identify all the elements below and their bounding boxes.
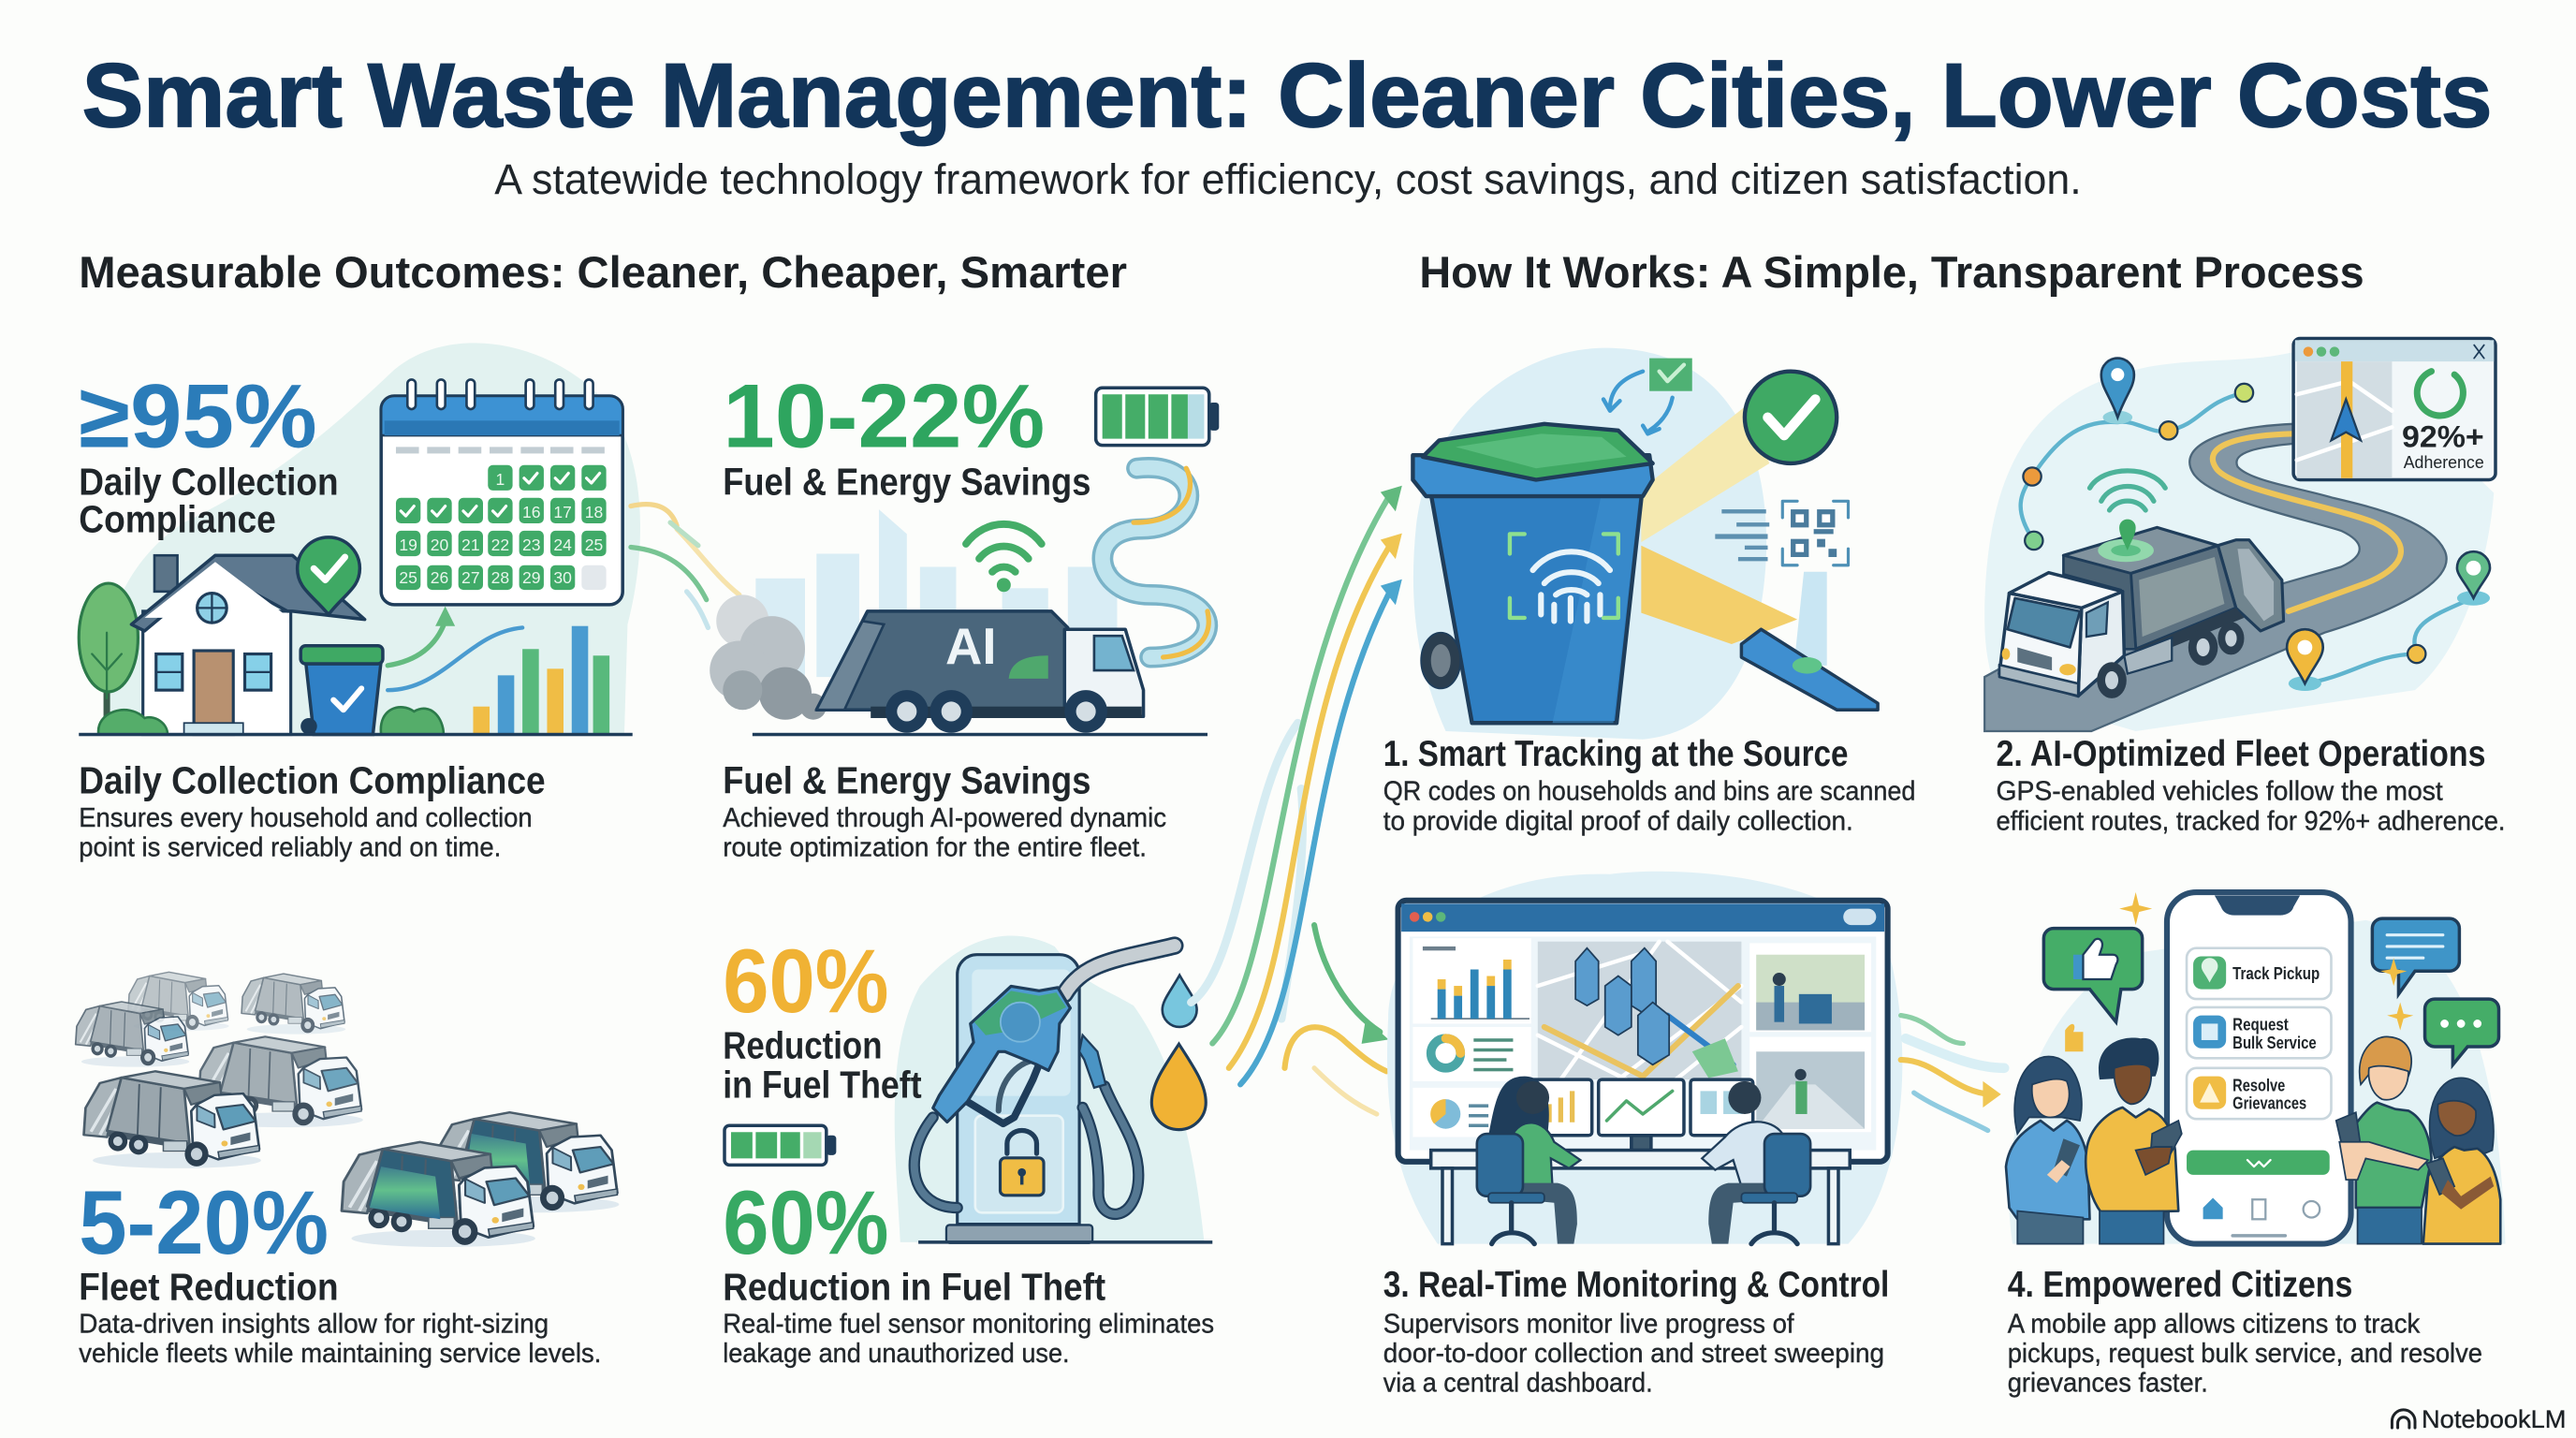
icon: wifi — [2089, 471, 2165, 510]
icon: calendar: 23 — [522, 536, 541, 554]
bar chart — [473, 626, 609, 735]
step description: to provide digital proof of daily collection. — [1383, 806, 1853, 836]
app card: request bulk service: Request — [2232, 1014, 2289, 1034]
figure: supervisor right — [1702, 1081, 1810, 1244]
stat label: in Fuel Theft — [723, 1063, 922, 1106]
scan light — [1794, 572, 1827, 666]
icon: dashboard monitor — [1398, 901, 1888, 1162]
scan beams — [1641, 404, 1797, 644]
step description: grievances faster. — [2008, 1369, 2208, 1399]
dashboard: donut panel — [1412, 1027, 1531, 1081]
background blob — [2009, 920, 2506, 1244]
step title: 1. Smart Tracking at the Source — [1383, 734, 1848, 774]
icon: faded fleet — [76, 972, 363, 1168]
icon: location check bubble — [298, 537, 359, 614]
card description: point is serviced reliably and on time. — [79, 832, 501, 862]
heading: how it works: How It Works: A Simple, Transparent Process — [1419, 248, 2364, 298]
icon: thumbs-up bubble — [2043, 929, 2143, 1022]
skyline — [755, 509, 1117, 677]
icon: green pin — [2457, 551, 2490, 606]
icon: exhaust smoke — [710, 594, 827, 720]
icon: navigation window: Adherence — [2404, 452, 2484, 472]
stat label: Daily Collection — [79, 460, 339, 503]
notebooklm logo: NotebookLM — [2422, 1404, 2566, 1433]
icon: fuel pump — [915, 946, 1175, 1243]
icon: calendar: 30 — [553, 568, 572, 587]
icon: desk monitors — [1530, 1079, 1753, 1151]
app button — [2187, 1151, 2330, 1175]
icon: blue pin — [2101, 359, 2134, 424]
card description: vehicle fleets while maintaining service levels. — [79, 1339, 601, 1369]
stat label — [79, 460, 339, 541]
panel: reduction in fuel theft — [723, 932, 1214, 1369]
icon: smart bin — [300, 646, 383, 735]
background blob — [105, 343, 640, 735]
icon: calendar: 19 — [399, 536, 417, 554]
route waypoints — [2023, 384, 2425, 663]
icon: check badge — [1745, 372, 1837, 463]
step description: QR codes on households and bins are scanned — [1383, 777, 1915, 807]
panel: daily collection compliance — [79, 343, 640, 862]
app card: request bulk service: Bulk Service — [2232, 1033, 2317, 1052]
icon: smartphone — [2167, 892, 2351, 1244]
figure: citizen woman in yellow — [2423, 1078, 2500, 1244]
panel: step 1 smart tracking — [1383, 348, 1915, 836]
card title: Reduction in Fuel Theft — [723, 1265, 1105, 1308]
arrow: trend — [388, 607, 522, 690]
background blob — [1387, 872, 1902, 1244]
icon: desk — [1431, 1151, 1850, 1244]
road — [1984, 424, 2447, 731]
icon: calendar: 28 — [491, 568, 509, 587]
figure: supervisor left — [1477, 1077, 1580, 1244]
arrows: dashboard to citizens — [1901, 1016, 2004, 1131]
app nav bar — [2203, 1197, 2320, 1238]
card description — [79, 1309, 601, 1369]
icon: calendar: 26 — [431, 568, 448, 587]
step description: via a central dashboard. — [1383, 1369, 1653, 1399]
card title: Daily Collection Compliance — [79, 759, 546, 802]
icon: phone — [1741, 629, 1878, 710]
icon: calendar: 16 — [522, 503, 541, 521]
icon: bushes — [98, 707, 444, 735]
icon: calendar — [381, 379, 622, 605]
icon: green message bubble — [2425, 999, 2499, 1064]
icon: battery — [1096, 388, 1219, 446]
dashboard: city map — [1538, 942, 1741, 1079]
arrows: outcomes flowing into process — [1191, 488, 1399, 1114]
card description: Ensures every household and collection — [79, 803, 533, 833]
dashboard: bar chart — [1412, 938, 1531, 1023]
icon: route truck — [1999, 520, 2284, 698]
icon: battery — [724, 1125, 836, 1165]
icon: yellow pin — [2287, 629, 2323, 691]
heading: measurable outcomes: Measurable Outcomes: Cleaner, Cheaper, Smarter — [79, 248, 1127, 298]
card title: Fleet Reduction — [79, 1265, 339, 1308]
icon: calendar: 17 — [553, 503, 572, 521]
step description — [2008, 1309, 2482, 1399]
panel: fuel and energy savings — [710, 366, 1219, 862]
icon: calendar: 24 — [553, 536, 572, 554]
app card: track pickup: Track Pickup — [2232, 963, 2320, 983]
app card: resolve grievances: Grievances — [2232, 1093, 2306, 1113]
stat: 10-22 percent: 10-22% — [723, 366, 1045, 466]
icon: calendar: 20 — [431, 536, 448, 554]
icon: AI garbage truck: AI — [945, 618, 996, 675]
panel: step 2 AI-optimized fleet — [1984, 337, 2506, 836]
icon: smart bin — [1412, 424, 1653, 723]
dashboard: camera feed street sweeping — [1749, 1036, 1871, 1132]
icon: AI garbage truck — [816, 611, 1144, 733]
ground line — [753, 733, 1208, 736]
panel: fleet reduction — [76, 972, 619, 1369]
sparkles — [2065, 892, 2413, 1051]
icon: tree — [79, 583, 138, 735]
app card: resolve grievances — [2187, 1068, 2331, 1119]
icon: calendar: 22 — [491, 536, 509, 554]
stat label: Fuel & Energy Savings — [723, 460, 1090, 503]
background blob — [1413, 348, 1766, 740]
stat label — [723, 1023, 922, 1106]
card description: leakage and unauthorized use. — [723, 1339, 1070, 1369]
title: Smart Waste Management: Cleaner Cities, Lower Costs — [82, 46, 2492, 146]
card description — [79, 803, 533, 862]
card title: Fuel & Energy Savings — [723, 759, 1090, 802]
step description: GPS-enabled vehicles follow the most — [1996, 777, 2443, 807]
icon: calendar: 29 — [522, 568, 541, 587]
stat: 60 percent green: 60% — [723, 1173, 889, 1273]
icon: calendar: 21 — [461, 536, 480, 554]
stat label: Compliance — [79, 498, 276, 541]
icon: calendar: 27 — [461, 568, 480, 587]
stat label: Reduction — [723, 1023, 882, 1066]
card description: Real-time fuel sensor monitoring eliminates — [723, 1309, 1214, 1339]
icon: blue fuel drop — [1163, 976, 1197, 1027]
step title: 3. Real-Time Monitoring & Control — [1383, 1265, 1889, 1305]
icon: sync arrows — [1603, 372, 1673, 433]
app card: request bulk service — [2187, 1007, 2331, 1058]
icon: calendar: 1 — [496, 470, 505, 489]
icon: navigation window: 92%+ — [2402, 419, 2484, 453]
ground line — [918, 1240, 1212, 1244]
step description: efficient routes, tracked for 92%+ adherence. — [1996, 806, 2506, 836]
stat: 5-20 percent: 5-20% — [79, 1173, 329, 1273]
step title: 2. AI-Optimized Fleet Operations — [1996, 734, 2485, 774]
app card: track pickup — [2187, 948, 2331, 999]
card description — [723, 1309, 1214, 1369]
figure: citizen in green — [2336, 1036, 2432, 1244]
ground line — [79, 733, 633, 736]
stat: 60 percent yellow: 60% — [723, 932, 889, 1032]
step description — [1996, 777, 2506, 836]
icon: calendar: 18 — [585, 503, 603, 521]
step description: pickups, request bulk service, and resolve — [2008, 1339, 2482, 1369]
icon: small checkbox — [1649, 359, 1692, 391]
background blob — [895, 936, 1204, 1242]
icon: QR code — [1715, 501, 1848, 565]
step description: A mobile app allows citizens to track — [2008, 1309, 2421, 1339]
step title: 4. Empowered Citizens — [2008, 1265, 2352, 1305]
subtitle: A statewide technology framework for efficiency, cost savings, and citizen satisfaction. — [494, 155, 2082, 203]
background blob — [1984, 337, 2494, 731]
icon: wifi — [966, 524, 1042, 588]
figure: citizen in blue — [2006, 1057, 2089, 1244]
card description: route optimization for the entire fleet. — [723, 832, 1147, 862]
arrows: streaks between outcome panels — [631, 505, 739, 627]
step description: Supervisors monitor live progress of — [1383, 1309, 1794, 1339]
icon: navigation window — [2293, 339, 2496, 479]
icon: blue message bubble — [2372, 918, 2459, 994]
step description — [1383, 777, 1915, 836]
icon: calendar: 25 — [585, 536, 603, 554]
panel: step 4 empowered citizens — [2006, 892, 2506, 1399]
stat: 95 percent: ≥95% — [79, 366, 317, 466]
step description: door-to-door collection and street sweeping — [1383, 1339, 1884, 1369]
figure: citizen in yellow — [2086, 1038, 2182, 1244]
route lines — [2021, 392, 2472, 683]
card description — [723, 803, 1166, 862]
panel: step 3 real-time monitoring — [1383, 872, 1902, 1399]
app card: resolve grievances: Resolve — [2232, 1075, 2285, 1094]
dashboard: pie panel — [1412, 1088, 1531, 1137]
icon: yellow fuel drop — [1151, 1044, 1206, 1130]
card description: Data-driven insights allow for right-sizing — [79, 1309, 549, 1339]
icon: route — [1103, 467, 1208, 657]
card description: Achieved through AI-powered dynamic — [723, 803, 1166, 833]
dashboard: camera feed collection — [1749, 943, 1871, 1032]
icon: calendar: 25 — [399, 568, 417, 587]
step description — [1383, 1309, 1884, 1399]
icon: house — [131, 555, 365, 735]
icon: optimized fleet — [342, 1112, 619, 1247]
